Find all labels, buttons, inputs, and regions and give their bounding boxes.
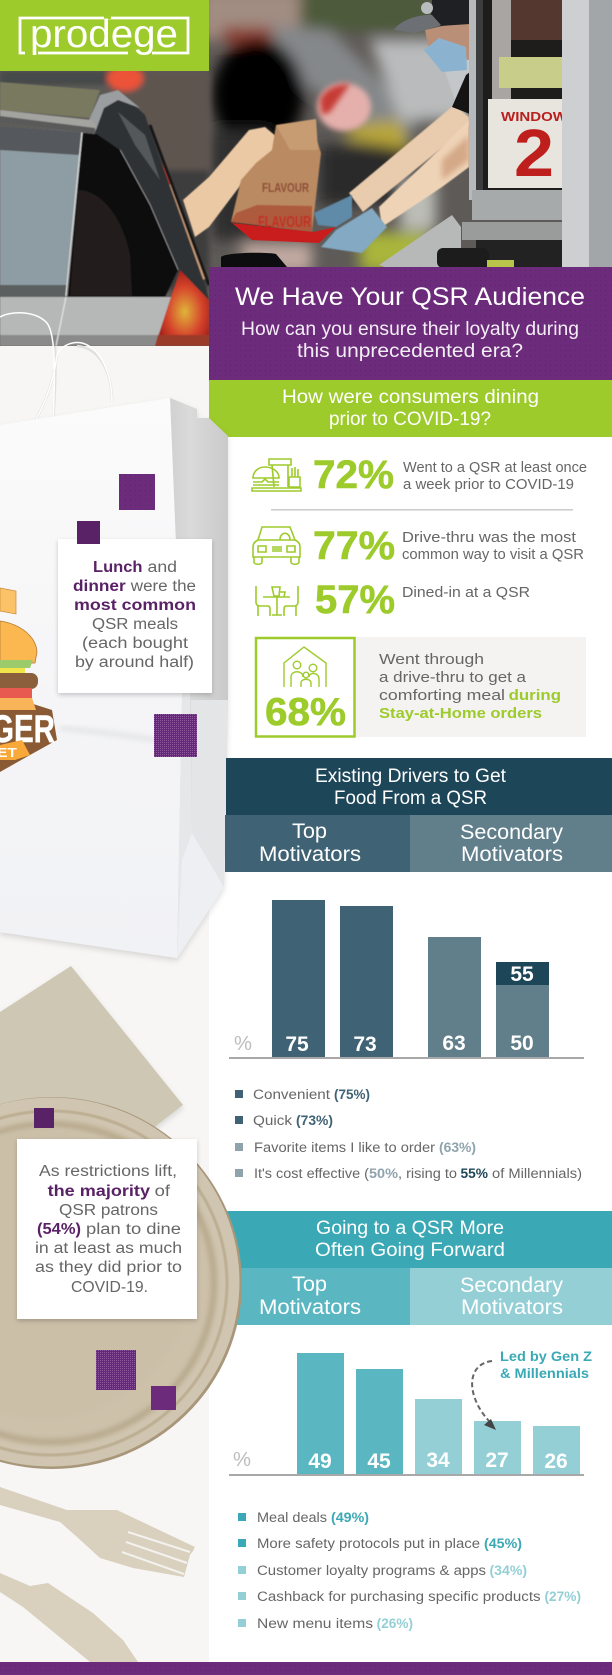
- callout: dine in plans: [17, 1139, 197, 1319]
- legend: existing drivers: , rising to: [398, 1166, 457, 1181]
- callout: dine in plans: as they did prior to: [35, 1259, 182, 1276]
- bar chart: existing drivers: 55: [510, 963, 534, 986]
- annotation: led by Gen Z and Millennials: & Millennials: [500, 1365, 589, 1381]
- bar chart: going forward: [229, 1353, 584, 1476]
- number: 77%: [313, 524, 395, 568]
- bar chart: going forward: 27: [485, 1449, 509, 1472]
- tab: secondary motivators: [410, 1268, 612, 1325]
- tab: top motivators: [225, 815, 410, 872]
- panel: going forward header: Going to a QSR More: [316, 1218, 504, 1239]
- legend: existing drivers: 55%: [460, 1166, 488, 1181]
- callout: lunch and dinner: (each bought: [82, 635, 189, 652]
- tab: secondary motivators: Secondary: [460, 1274, 564, 1297]
- callout: dine in plans: plan to dine: [86, 1221, 181, 1238]
- tray: [232, 223, 336, 243]
- paper bag: [0, 398, 228, 958]
- callout: 68%: [256, 637, 586, 737]
- legend: going forward: (26%): [377, 1616, 413, 1631]
- food bag: [231, 119, 321, 232]
- stat: 72%: Went to a QSR at least once: [403, 460, 587, 476]
- panel: existing drivers header: Food From a QSR: [334, 788, 487, 809]
- tab: secondary motivators: Motivators: [461, 1296, 563, 1319]
- legend: existing drivers: of Millennials): [492, 1166, 582, 1181]
- window sign: [488, 99, 562, 188]
- bar chart: going forward: %: [233, 1449, 251, 1471]
- paper plate: [0, 1097, 242, 1469]
- car: [0, 82, 209, 346]
- callout: dine in plans: (54%): [37, 1221, 81, 1238]
- side mirror: [221, 253, 287, 267]
- legend: existing drivers: It's cost effective (: [254, 1166, 370, 1181]
- customer arm: [182, 126, 275, 238]
- bar chart: going forward: 49: [308, 1450, 332, 1473]
- tab: secondary motivators: [410, 815, 612, 872]
- legend: existing drivers: (63%): [439, 1140, 476, 1155]
- icon: family in house: [284, 647, 326, 687]
- bar chart: existing drivers: %: [234, 1033, 252, 1055]
- bar chart: existing drivers: 50: [510, 1032, 534, 1055]
- callout: lunch and dinner: and: [148, 559, 177, 576]
- stat: 77%: common way to visit a QSR: [402, 547, 584, 563]
- bar chart: going forward: 34: [426, 1449, 450, 1472]
- fork: [0, 1487, 195, 1577]
- arrow: [472, 1361, 496, 1430]
- panel: going forward header: [222, 1211, 612, 1268]
- panel: title: [209, 267, 612, 380]
- worker head: [446, 60, 469, 99]
- panel: dining question header: [209, 380, 612, 437]
- rear-left background of car: [0, 65, 210, 291]
- callout: lunch and dinner: by around half): [75, 654, 194, 671]
- napkin: [0, 966, 183, 1160]
- footer band: [0, 1662, 612, 1675]
- legend: going forward: (27%): [544, 1589, 581, 1604]
- tab: top motivators: Top: [292, 820, 327, 843]
- panel: going forward header: Often Going Forward: [315, 1240, 505, 1261]
- description: [379, 652, 561, 722]
- description: Went through: [379, 652, 484, 668]
- legend: going forward: Meal deals: [257, 1510, 327, 1525]
- icon: car: [253, 527, 300, 564]
- bar chart: existing drivers: 73: [353, 1033, 377, 1056]
- window sign: WINDOW: [501, 109, 568, 124]
- number: 72%: [313, 453, 394, 497]
- burger logo on bag: [0, 588, 57, 772]
- worker arms: [349, 105, 469, 212]
- legend: existing drivers: Quick: [253, 1113, 292, 1128]
- callout: dine in plans: QSR patrons: [59, 1202, 158, 1219]
- stat: 77%: Drive-thru was the most: [402, 530, 576, 546]
- knife: [0, 1573, 138, 1662]
- legend: going forward: Cashback for purchasing specific products: [257, 1589, 541, 1604]
- legend: going forward: Customer loyalty programs & apps: [257, 1563, 486, 1578]
- bar chart: existing drivers: 63: [442, 1032, 466, 1055]
- annotation: led by Gen Z and Millennials: [500, 1348, 592, 1381]
- description: a drive-thru to get a: [379, 670, 527, 686]
- icon: table and chairs: [256, 586, 298, 616]
- callout: lunch and dinner: [58, 539, 212, 693]
- legend: going forward: (45%): [484, 1536, 522, 1551]
- stat: 72%: [252, 453, 587, 497]
- tab: top motivators: Motivators: [259, 1296, 361, 1319]
- number: 57%: [315, 578, 395, 622]
- legend: existing drivers: (75%): [334, 1087, 370, 1102]
- description: Stay-at-Home orders: [379, 706, 542, 722]
- legend: existing drivers: [235, 1087, 582, 1181]
- legend: existing drivers: 50%: [369, 1166, 398, 1181]
- gloves: [314, 195, 352, 227]
- callout: dine in plans: in at least as much: [35, 1240, 182, 1257]
- legend: existing drivers: (73%): [296, 1113, 333, 1128]
- legend: existing drivers: Favorite items I like to order: [254, 1140, 436, 1155]
- heading: main title: We Have Your QSR Audience: [235, 283, 585, 311]
- panel: dining question header: How were consumers dining: [282, 386, 539, 408]
- callout: dine in plans: As restrictions lift,: [39, 1163, 177, 1180]
- tab: secondary motivators: Secondary: [460, 821, 564, 844]
- legend: going forward: More safety protocols put in place: [257, 1536, 480, 1551]
- legend: going forward: New menu items: [257, 1616, 373, 1631]
- bar chart: existing drivers: 75: [285, 1033, 309, 1056]
- legend: going forward: (34%): [490, 1563, 527, 1578]
- photo: drive-thru hand-off: [0, 0, 612, 346]
- stat: 77%: [253, 524, 584, 568]
- callout: dine in plans: the majority: [48, 1183, 150, 1200]
- bar chart: going forward: 26: [544, 1450, 568, 1473]
- legend: going forward: (49%): [331, 1510, 369, 1525]
- icon: burger and drink: [252, 459, 301, 491]
- callout: dine in plans: of: [155, 1183, 171, 1200]
- panel: dining question header: prior to COVID-19?: [329, 408, 491, 430]
- panel: existing drivers header: [226, 758, 612, 815]
- legend: existing drivers: Convenient: [253, 1087, 330, 1102]
- logo panel: [0, 0, 209, 71]
- description: comforting meal: [379, 688, 505, 704]
- callout: lunch and dinner: dinner: [73, 578, 126, 595]
- tab: top motivators: [225, 1268, 410, 1325]
- logo: prodege: prodege: [30, 13, 178, 56]
- number: 68%: [265, 691, 346, 734]
- bar chart: existing drivers: [229, 900, 584, 1059]
- callout: lunch and dinner: QSR meals: [92, 616, 178, 633]
- tab: secondary motivators: Motivators: [461, 843, 563, 866]
- stat: 72%: a week prior to COVID-19: [403, 477, 574, 493]
- callout: dine in plans: COVID-19.: [71, 1279, 148, 1296]
- bar chart: going forward: 45: [367, 1450, 391, 1473]
- legend: going forward: [238, 1510, 581, 1631]
- subheading line 1: How can you ensure their loyalty during: [241, 318, 579, 340]
- annotation: led by Gen Z and Millennials: Led by Gen Z: [500, 1348, 592, 1364]
- tab: top motivators: Top: [292, 1273, 327, 1296]
- tab: top motivators: Motivators: [259, 843, 361, 866]
- subheading line 2: this unprecedented era?: [297, 340, 523, 362]
- food bag: FLAVOUR: [262, 180, 309, 195]
- callout: lunch and dinner: were the: [130, 578, 196, 595]
- callout: lunch and dinner: most common: [74, 597, 196, 614]
- food bag: FLAVOUR: [258, 214, 311, 231]
- paper bag handles: [0, 313, 112, 421]
- callout: lunch and dinner: Lunch: [93, 559, 142, 576]
- stat: 57%: [256, 578, 530, 622]
- window sign: 2: [514, 116, 554, 191]
- description: during: [509, 688, 561, 704]
- decorative squares: [34, 474, 197, 1410]
- booth: [379, 0, 612, 270]
- panel: existing drivers header: Existing Drivers to Get: [315, 766, 507, 787]
- stat: 57%: Dined-in at a QSR: [402, 585, 530, 601]
